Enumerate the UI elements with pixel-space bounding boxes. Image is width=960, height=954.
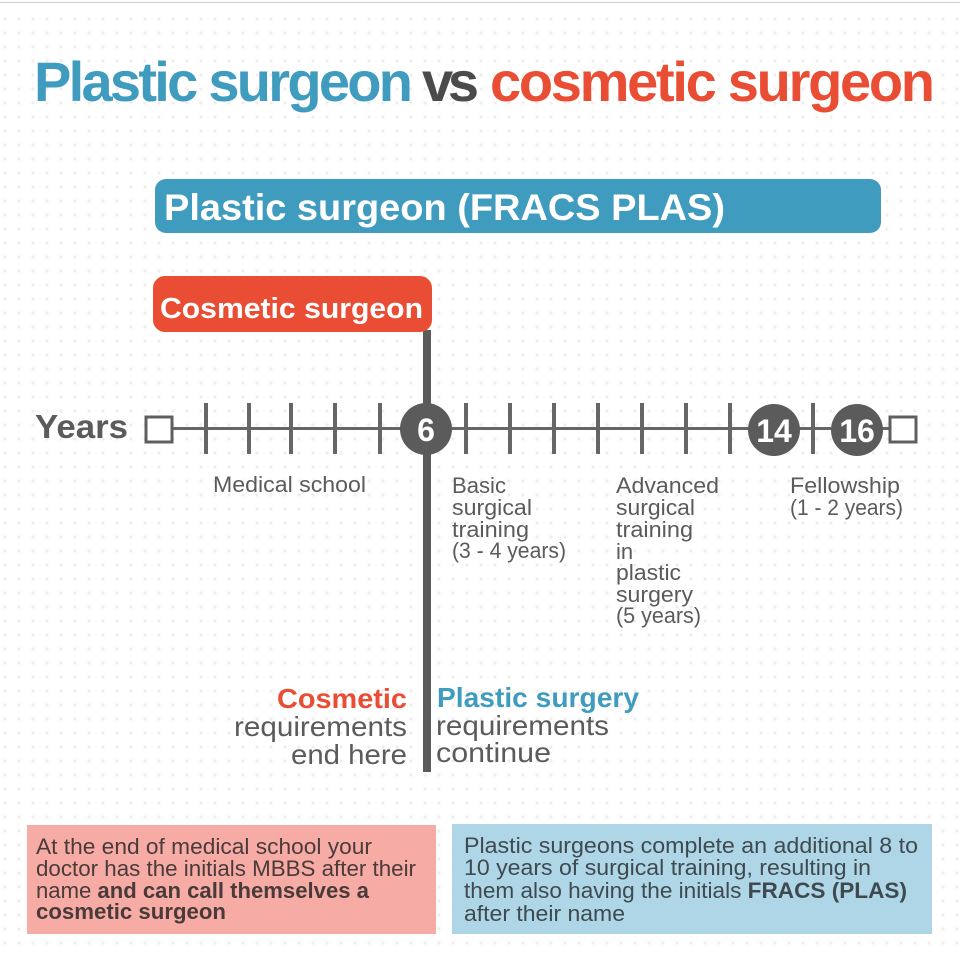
bar: cosmetic surgeon: Cosmetic surgeon <box>160 293 423 325</box>
panel: cosmetic surgeon note: name and can call themselves a <box>36 878 370 903</box>
end square <box>890 417 916 442</box>
panel: cosmetic surgeon note: doctor has the initials MBBS after their <box>36 856 416 881</box>
label: advanced surgical training <box>616 473 719 628</box>
timeline <box>146 403 916 456</box>
panel: plastic surgeon note: 10 years of surgical training, resulting in <box>464 855 871 880</box>
label: fellowship <box>790 473 903 520</box>
marker 14: 14 <box>756 413 792 449</box>
bar: cosmetic surgeon <box>153 276 432 332</box>
marker 6 <box>400 403 452 455</box>
text: cosmetic requirements end here: Cosmetic <box>277 683 407 714</box>
title <box>34 50 935 113</box>
bar: plastic surgeon: Plastic surgeon (FRACS PLAS) <box>164 187 725 228</box>
panel: cosmetic surgeon note <box>27 825 436 934</box>
bar: plastic surgeon <box>155 179 881 233</box>
panel: plastic surgeon note <box>452 824 932 934</box>
label: basic surgical training <box>452 473 566 563</box>
marker 6: 6 <box>417 412 435 448</box>
panel: plastic surgeon note: them also having the initials FRACS (PLAS) <box>464 878 907 903</box>
title: vs <box>422 50 479 113</box>
text: cosmetic requirements end here: end here <box>291 739 407 770</box>
label: advanced surgical training: plastic <box>616 560 681 585</box>
label: advanced surgical training: Advanced <box>616 473 719 498</box>
label: medical school: Medical school <box>213 472 366 497</box>
title: cosmetic surgeon <box>490 50 935 113</box>
label: advanced surgical training: surgical <box>616 495 695 520</box>
text: plastic surgery requirements continue: requirements <box>436 710 609 741</box>
marker 16: 16 <box>839 413 875 449</box>
label: advanced surgical training: in <box>616 539 633 564</box>
panel: plastic surgeon note: after their name <box>464 901 625 926</box>
text: cosmetic requirements end here: requirements <box>234 711 407 742</box>
panel: cosmetic surgeon note: cosmetic surgeon <box>36 899 226 924</box>
start square <box>146 417 172 442</box>
vertical divider line <box>423 330 431 772</box>
text: plastic surgery requirements continue <box>436 682 639 768</box>
label: fellowship: (1 - 2 years) <box>790 495 903 520</box>
label: advanced surgical training: (5 years) <box>616 603 701 628</box>
title: Plastic surgeon <box>34 50 413 113</box>
marker 14 <box>748 404 800 456</box>
label: basic surgical training: training <box>452 517 529 542</box>
label: basic surgical training: surgical <box>452 495 532 520</box>
panel: cosmetic surgeon note: At the end of medical school your <box>36 834 372 859</box>
years label: Years <box>35 408 128 445</box>
label: basic surgical training: Basic <box>452 473 506 498</box>
label: advanced surgical training: surgery <box>616 582 693 607</box>
panel: plastic surgeon note: Plastic surgeons complete an additional 8 to <box>464 833 918 858</box>
marker 16 <box>831 404 883 456</box>
label: advanced surgical training: training <box>616 517 693 542</box>
label: basic surgical training: (3 - 4 years) <box>452 538 566 563</box>
text: plastic surgery requirements continue: Plastic surgery <box>437 682 639 713</box>
label: fellowship: Fellowship <box>790 473 900 498</box>
text: plastic surgery requirements continue: continue <box>436 737 551 768</box>
text: cosmetic requirements end here <box>234 683 407 770</box>
